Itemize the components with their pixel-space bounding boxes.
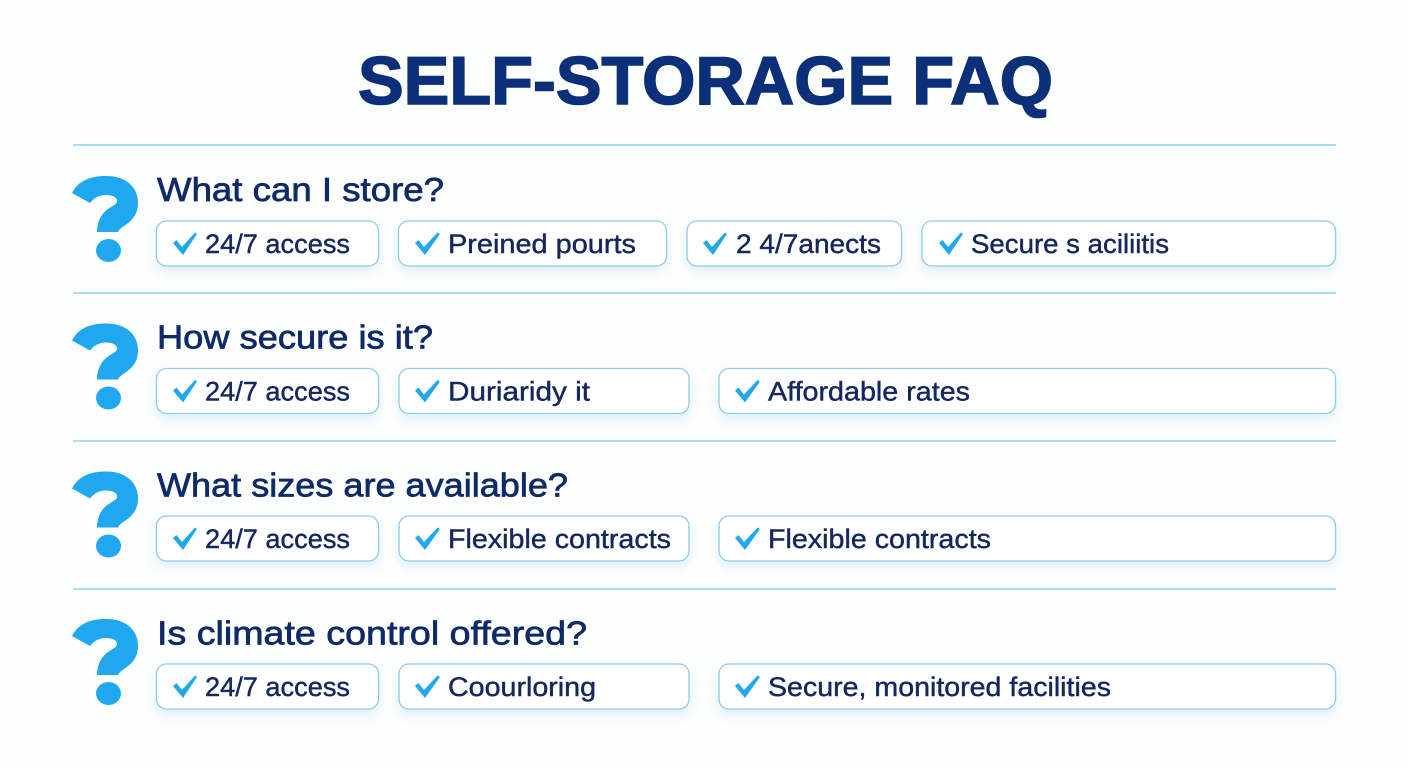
chip: Affordable rates xyxy=(719,368,1336,414)
chip: Flexible contracts: Flexible contracts xyxy=(448,524,671,554)
chip: Duriaridy it: Duriaridy it xyxy=(448,376,591,406)
chip: 24/7 access: 24/7 access xyxy=(205,672,350,702)
chip: 24/7 access xyxy=(156,516,378,561)
panel: is climate control offered xyxy=(72,614,1336,709)
chip: 24/7 access: 24/7 access xyxy=(205,524,350,554)
chip: 24/7 access: 24/7 access xyxy=(205,376,350,406)
icon: question mark xyxy=(72,176,138,262)
panel: what sizes are available xyxy=(72,466,1336,561)
chip: 24/7 access xyxy=(156,221,378,266)
panel: how secure is it xyxy=(72,318,1336,414)
chip: Affordable rates: Affordable rates xyxy=(768,376,970,406)
question heading: What can I store? xyxy=(157,171,444,208)
title: SELF-STORAGE FAQ xyxy=(358,43,1053,119)
chip: Secure s aciliitis: Secure s aciliitis xyxy=(971,229,1169,259)
chip: Coourloring: Coourloring xyxy=(448,672,596,702)
panel: what can I store xyxy=(72,171,1336,266)
question heading: What sizes are available? xyxy=(157,466,568,504)
chip: 2 4/7anects xyxy=(687,221,902,266)
icon: question mark xyxy=(72,619,138,705)
chip: Duriaridy it xyxy=(399,368,689,414)
chip: 24/7 access: 24/7 access xyxy=(205,229,350,259)
icon: question mark xyxy=(72,472,138,558)
chip: Secure s aciliitis xyxy=(922,221,1336,266)
chip: 24/7 access xyxy=(156,368,378,414)
chip: Flexible contracts: Flexible contracts xyxy=(768,524,991,554)
question heading: How secure is it? xyxy=(157,318,433,356)
chip: Flexible contracts xyxy=(399,516,689,561)
chip: Secure, monitored facilities xyxy=(719,664,1336,709)
icon: question mark xyxy=(72,324,138,410)
chip: Coourloring xyxy=(399,664,689,709)
chip: Secure, monitored facilities: Secure, monitored facilities xyxy=(768,672,1111,702)
question heading: Is climate control offered? xyxy=(157,614,587,652)
chip: 2 4/7anects: 2 4/7anects xyxy=(736,229,881,259)
chip: Preined pourts xyxy=(398,221,666,266)
chip: 24/7 access xyxy=(156,664,378,709)
chip: Preined pourts: Preined pourts xyxy=(448,229,636,259)
chip: Flexible contracts xyxy=(719,516,1336,561)
